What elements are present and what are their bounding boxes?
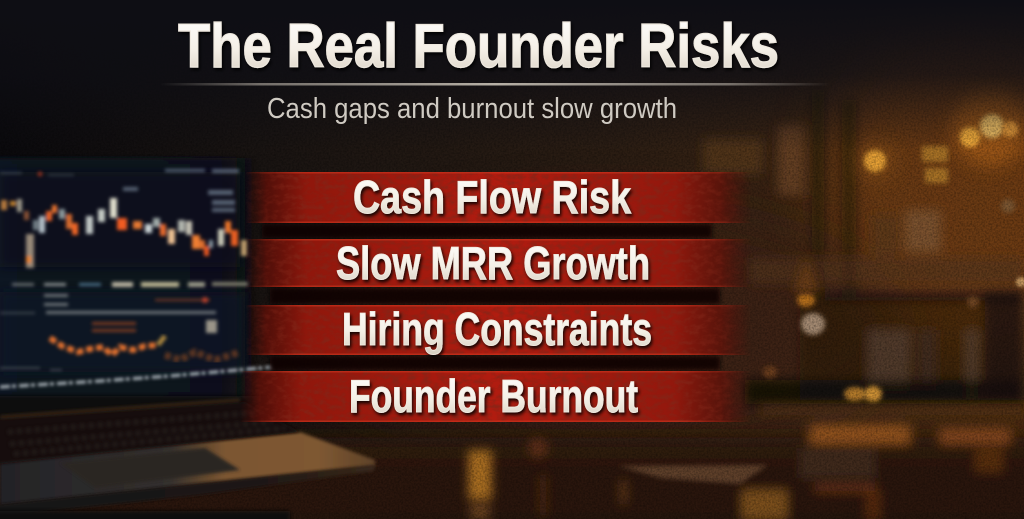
laptop: [0, 158, 375, 519]
bar shadows: [262, 224, 720, 370]
data table rows: [0, 282, 248, 333]
paper on table: [618, 465, 768, 484]
risk bar: Cash Flow Risk: [246, 171, 751, 223]
front edge: [0, 465, 375, 517]
street lights: [763, 90, 1024, 402]
lower ticker strip: [0, 367, 272, 387]
laptop screen: [0, 158, 260, 398]
buildings: [703, 90, 1024, 404]
screen header details: [0, 169, 239, 212]
title: The Real Founder Risks: [178, 12, 779, 81]
laptop hinge shadow: [0, 396, 270, 420]
risk bar: Slow MRR Growth: Slow MRR Growth: [336, 237, 650, 289]
candlestick chart: [1, 198, 247, 268]
title rule: [160, 83, 830, 86]
wet table reflections: [0, 406, 1024, 519]
keyboard deck: [0, 432, 375, 505]
keyboard: [0, 400, 300, 464]
risk bar: Hiring Constraints: Hiring Constraints: [342, 303, 652, 355]
risk bar: Founder Burnout: Founder Burnout: [349, 370, 638, 422]
subtitle: Cash gaps and burnout slow growth: [267, 93, 677, 125]
trackpad: [60, 448, 240, 488]
lower line chart: [50, 336, 240, 360]
risk bar: Cash Flow Risk: Cash Flow Risk: [353, 171, 631, 223]
